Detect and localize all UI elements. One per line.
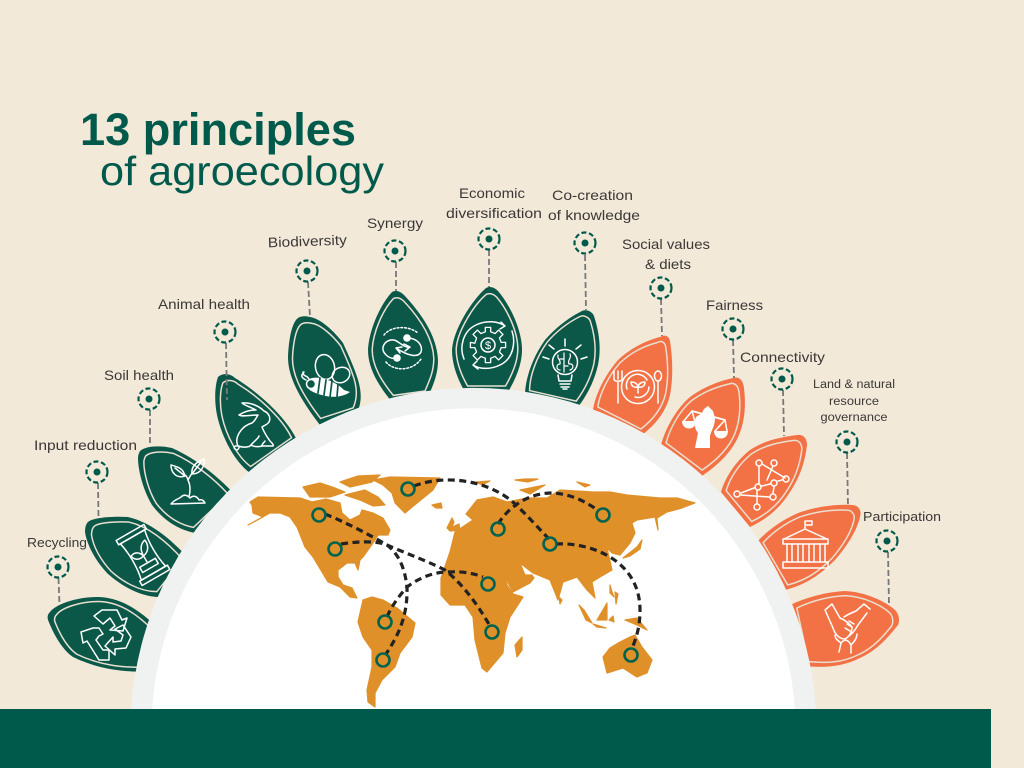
pin: animal health — [214, 322, 236, 400]
label: land and natural resource governance: Land & natural — [813, 379, 895, 391]
title — [80, 104, 385, 194]
label: land and natural resource governance: governance — [820, 412, 888, 424]
pin: biodiversity — [296, 260, 318, 317]
continents — [248, 475, 695, 707]
label: co-creation of knowledge — [548, 187, 640, 223]
label: animal health: Animal health — [158, 296, 250, 312]
pin: connectivity — [772, 368, 792, 436]
leaf: social values and diets — [593, 336, 672, 435]
footer bar — [0, 709, 991, 768]
label: co-creation of knowledge: of knowledge — [548, 207, 640, 223]
icon: bee — [302, 353, 352, 397]
label: synergy: Synergy — [367, 215, 423, 231]
leaf: land and natural resource governance — [757, 505, 861, 590]
leaf: connectivity — [721, 435, 807, 527]
panel: social principle leaves — [593, 336, 899, 667]
world map — [248, 475, 695, 707]
icon: gear with dollar — [462, 322, 514, 369]
pin: input reduction — [86, 462, 108, 517]
globe outer ring — [131, 388, 816, 709]
icon: fist with scales — [682, 406, 728, 448]
leaf: input reduction — [85, 517, 190, 597]
icon: seedling — [171, 459, 205, 504]
pin: land and natural resource governance — [836, 432, 858, 506]
label: economic diversification: Economic — [459, 185, 525, 201]
pin: fairness — [722, 318, 744, 378]
title: of agroecology — [100, 148, 385, 194]
route markers — [312, 482, 638, 666]
pin: economic diversification — [478, 228, 500, 287]
pin: participation — [876, 530, 898, 605]
icon: rabbit — [234, 403, 273, 450]
pin: social values and diets — [650, 278, 672, 336]
icon: plate and cutlery — [614, 370, 662, 404]
pin: soil health — [138, 388, 160, 446]
leaf: fairness — [661, 377, 745, 476]
label: land and natural resource governance — [813, 379, 895, 424]
label: co-creation of knowledge: Co-creation — [552, 187, 633, 203]
leaf: recycling — [48, 597, 160, 672]
leaf: economic diversification — [452, 287, 522, 392]
routes — [325, 480, 640, 654]
pin: co-creation of knowledge — [574, 232, 596, 310]
leaf: co-creation of knowledge — [525, 310, 600, 407]
label: biodiversity: Biodiversity — [268, 232, 347, 250]
label: soil health: Soil health — [104, 367, 174, 383]
icon: synergy loop — [383, 328, 421, 369]
label: connectivity: Connectivity — [740, 349, 825, 365]
label: recycling: Recycling — [27, 535, 87, 550]
title: 13 principles — [80, 104, 356, 155]
leaf: participation — [790, 591, 899, 667]
label: input reduction: Input reduction — [34, 437, 137, 453]
icon: fertilizer bag — [116, 524, 170, 586]
globe inner disc — [152, 408, 795, 709]
label: fairness: Fairness — [706, 297, 763, 313]
pin: synergy — [384, 240, 406, 291]
icon: light bulb — [543, 339, 587, 389]
label: economic diversification — [446, 185, 542, 221]
leaf: synergy — [368, 291, 438, 402]
leaf: animal health — [215, 374, 297, 473]
label: land and natural resource governance: resource — [829, 396, 879, 408]
label: social values and diets: Social values — [622, 236, 710, 252]
leaf: soil health — [138, 446, 235, 533]
label: social values and diets — [622, 236, 710, 272]
icon: government building — [783, 521, 828, 568]
icon: recycling arrows — [81, 610, 131, 660]
pin: recycling — [48, 556, 68, 605]
label: economic diversification: diversification — [446, 205, 542, 221]
leaf: biodiversity — [288, 316, 361, 425]
icon: joined hands — [825, 604, 870, 653]
label: participation: Participation — [863, 509, 941, 524]
icon: network — [734, 460, 789, 510]
label: social values and diets: & diets — [645, 256, 691, 272]
dollar sign: $ — [485, 340, 491, 352]
panel: ecological principle leaves — [48, 287, 600, 672]
